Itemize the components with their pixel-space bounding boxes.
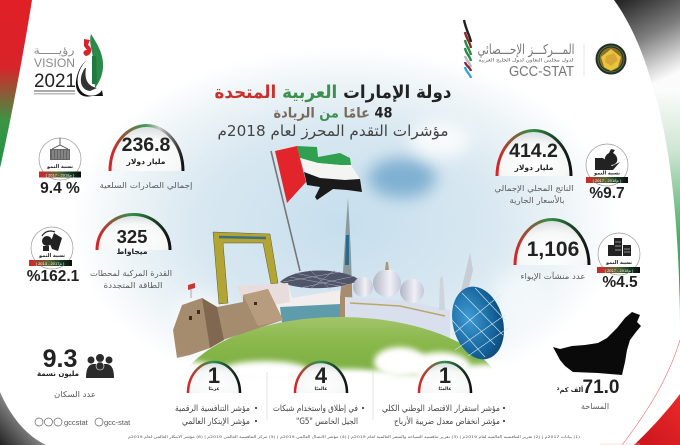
label: exports: إجمالي الصادرات السلعية: [100, 181, 192, 191]
growth badge: renewable: [16, 227, 90, 285]
panel: exports: [28, 124, 192, 197]
Dubai Frame: [213, 232, 278, 304]
list: regional indicators: [175, 404, 257, 427]
growth badge: exports: [28, 138, 92, 197]
social handles: gcc-stat: [104, 418, 131, 427]
logo: Vision 2021: VISION: [34, 56, 75, 70]
growth badge: hospitality: [583, 233, 660, 291]
gauge: exports value: مليار دولار: [126, 157, 166, 166]
logo: Vision 2021: 2021: [34, 71, 76, 92]
list: regional indicators: مؤشر الإبتكار العالمي: [182, 417, 250, 427]
gauge: GDP value: 414.2: [509, 140, 558, 162]
subtitle: 48 عامًا من الريادة: [274, 106, 392, 122]
list: 5G indicators: في إطلاق واستخدام شبكات: [273, 404, 358, 414]
panel: population: [32, 345, 124, 399]
gauge: renewable capacity: [84, 213, 180, 250]
growth badge: renewable: %162.1: [27, 268, 80, 285]
corner swoosh: red bottom right: [600, 340, 680, 445]
growth badge: hospitality: نسبة النمو: [605, 260, 632, 266]
panel: population: مليون نسمة: [37, 369, 79, 378]
social handles: gccstat: [64, 418, 89, 427]
map: UAE silhouette: [553, 312, 641, 375]
icon: GCC emblem: [596, 44, 626, 74]
gauge: global rank: عالميًا: [438, 386, 452, 392]
panel: population: 9.3: [43, 345, 77, 373]
list: global indicators: مؤشر انخفاض معدل ضريبة الأرباح: [394, 416, 500, 427]
footnotes: (1) بيانات 2017م | (2) تقرير التنافسية العالمية لعام 2019م | (3) تقرير تنافسية السياحة والسفر العالمية لعام 2019م | (4) مؤشر الاتصال العالمي 2019م | (5) مركز التنافسية العالمي 2019م | (6) مؤشر الابتكار العالمي لعام 2019م: [128, 434, 581, 439]
label: renewable capacity: الطاقة المتجددة: [104, 281, 162, 290]
panel: renewable energy: [16, 213, 180, 290]
icon: energy: [42, 231, 62, 251]
flagpole: [271, 151, 300, 271]
sky background with clouds: [60, 40, 630, 410]
Aldar sphere: [444, 281, 512, 365]
growth badge: GDP: نسبة النمو: [593, 170, 620, 176]
growth badge: hospitality: ( 2017 - 2018م ): [605, 268, 634, 273]
gauge: 5G rank: 4: [315, 363, 328, 388]
growth badge: exports: 9.4 %: [40, 180, 80, 197]
label: GDP: بالأسعار الجارية: [510, 195, 564, 205]
icon: people group: [86, 354, 114, 378]
icon: UAE flag: [275, 146, 362, 203]
list: global indicators: مؤشر استقرار الاقتصاد الوطني الكلي: [382, 404, 500, 414]
growth badge: GDP: [572, 144, 650, 202]
gauge: global rank: 1: [439, 363, 451, 388]
fort: [173, 283, 290, 358]
logo: GCC-STAT: [464, 20, 626, 80]
icon: hotel buildings: [608, 238, 631, 256]
label: GDP: [494, 184, 574, 205]
central illustration: UAE landmarks: [90, 146, 590, 440]
logo: Vision 2021: رؤيـــــة: [34, 44, 74, 57]
growth badge: renewable: نسبة النمو: [38, 253, 65, 259]
label: hospitality: عدد منشآت الإيواء: [520, 271, 586, 282]
gauge: regional rank: 1: [208, 363, 220, 388]
icon: coloured stripes: [464, 20, 471, 78]
panel: area: 71.0: [583, 377, 619, 398]
icon: money bag in hand: [595, 149, 620, 170]
corner swoosh: red and green top left: [0, 0, 32, 168]
list: regional indicators: مؤشر التنافسية الرقمية: [175, 404, 250, 414]
panel: population: عدد السكان: [54, 390, 96, 399]
clouds under hill: [90, 347, 590, 440]
gauge: 5G rank: [285, 361, 357, 394]
list: 5G indicators: الجيل الخامس "G5": [296, 417, 358, 427]
panel: hospitality: [502, 218, 660, 291]
gauge: renewable capacity: 325: [117, 226, 147, 247]
list: 5G indicators: [273, 404, 364, 427]
panel: area: ألف كم²: [557, 385, 583, 394]
corner swoosh: green right edge: [654, 87, 680, 335]
logo: Vision 2021: [34, 34, 103, 97]
title block: [215, 83, 452, 140]
growth badge: GDP: ( 2017 - 2018م ): [593, 178, 622, 183]
gauge: 5G rank: عالميًا: [314, 386, 328, 392]
logo: GCC-STAT: المـــركـــز الإحـــصائي: [478, 42, 574, 58]
logo: GCC-STAT: لدول مجلس التعاون لدول الخليج العربية: [478, 58, 574, 64]
growth badge: exports: نسبة النمو: [46, 164, 73, 170]
gauge: regional rank: عربيًا: [208, 386, 220, 392]
gauge: hospitality value: 1,106: [527, 238, 579, 261]
gauge: regional rank: [178, 361, 250, 394]
panel: 5G rank: [273, 361, 364, 427]
icon: container on crane: [50, 138, 70, 160]
label: renewable capacity: [90, 269, 172, 290]
subheading: مؤشرات التقدم المحرز لعام 2018م: [218, 122, 448, 140]
gauge: global rank: [408, 361, 482, 394]
logo: GCC-STAT: GCC-STAT: [509, 64, 574, 80]
gauge: GDP value: مليار دولار: [514, 163, 554, 172]
label: renewable capacity: القدرة المركبة لمحطات: [90, 269, 172, 278]
panel: GDP: [484, 129, 650, 205]
Louvre dome: [280, 270, 360, 288]
growth badge: hospitality: %4.5: [602, 274, 638, 291]
panel: regional rank: [175, 361, 257, 427]
list: global indicators: [382, 404, 505, 427]
label: GDP: الناتج المحلي الإجمالي: [494, 184, 574, 194]
gauge: hospitality value: [502, 218, 600, 266]
corner swoosh: grey bottom left: [0, 392, 46, 445]
gauge: GDP value: [484, 129, 584, 176]
corner swoosh: dark top right: [614, 0, 680, 92]
Burj Khalifa: [338, 198, 353, 317]
green hill: [175, 317, 505, 400]
panel: area: [552, 312, 641, 411]
growth badge: renewable: ( 2013 - 2017م ): [36, 261, 65, 266]
gauge: exports value: [96, 124, 192, 171]
growth badge: GDP: %9.7: [589, 185, 625, 202]
panel: area: المساحة: [581, 402, 609, 411]
social handles: [35, 418, 131, 427]
heading: دولة الإمارات العربية المتحدة: [215, 83, 452, 103]
unit: megawatt: ميجاواط: [117, 247, 148, 256]
panel: global rank: [382, 361, 505, 427]
Grand Mosque: [345, 253, 473, 345]
gauge: exports value: 236.8: [122, 134, 171, 156]
growth badge: exports: ( 2017 - 2018م ): [46, 172, 75, 178]
